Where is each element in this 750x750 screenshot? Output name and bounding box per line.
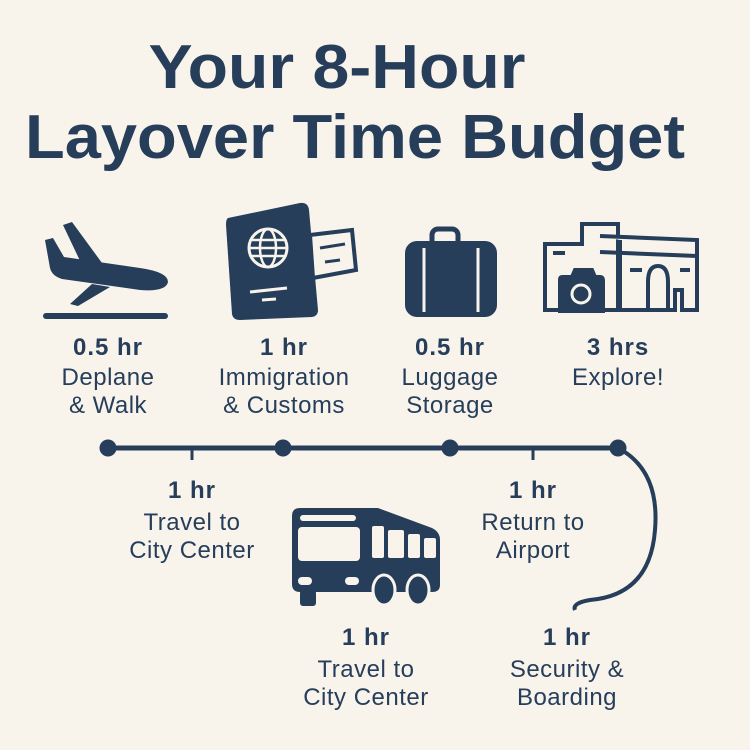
label: travel to city: Travel to xyxy=(144,509,240,536)
icon: passport xyxy=(226,203,356,320)
label: security: Boarding xyxy=(517,684,617,711)
label: security xyxy=(510,624,624,711)
label: explore: 3 hrs xyxy=(587,334,649,361)
label: luggage: 0.5 hr xyxy=(415,334,485,361)
label: travel to city 2: 1 hr xyxy=(342,624,390,651)
label: travel to city: City Center xyxy=(129,537,255,564)
label: deplane: & Walk xyxy=(69,392,148,419)
label: immigration xyxy=(219,334,349,419)
label: deplane: Deplane xyxy=(62,364,154,391)
label: travel to city 2: City Center xyxy=(303,684,429,711)
label: luggage: Storage xyxy=(406,392,494,419)
label: return: Airport xyxy=(496,537,570,564)
label: luggage xyxy=(402,334,498,419)
label: return xyxy=(481,477,585,564)
label: deplane xyxy=(62,334,154,419)
label: return: 1 hr xyxy=(509,477,557,504)
label: luggage: Luggage xyxy=(402,364,498,391)
icon: suitcase xyxy=(405,229,497,317)
title: Layover Time Budget xyxy=(25,103,685,172)
title xyxy=(25,33,685,172)
icon: bus xyxy=(292,508,440,606)
icon: airplane landing xyxy=(43,222,168,319)
label: travel to city: 1 hr xyxy=(168,477,216,504)
timeline xyxy=(100,440,656,610)
label: travel to city 2 xyxy=(303,624,429,711)
label: return: Return to xyxy=(481,509,585,536)
label: travel to city xyxy=(129,477,255,564)
title: Your 8-Hour xyxy=(148,33,526,102)
label: immigration: & Customs xyxy=(223,392,345,419)
label: explore: Explore! xyxy=(572,364,664,391)
label: immigration: 1 hr xyxy=(260,334,308,361)
label: explore xyxy=(572,334,664,391)
label: immigration: Immigration xyxy=(219,364,349,391)
label: deplane: 0.5 hr xyxy=(73,334,143,361)
label: security: 1 hr xyxy=(543,624,591,651)
icon: landmark and camera xyxy=(545,224,697,311)
label: travel to city 2: Travel to xyxy=(318,656,414,683)
label: security: Security & xyxy=(510,656,624,683)
